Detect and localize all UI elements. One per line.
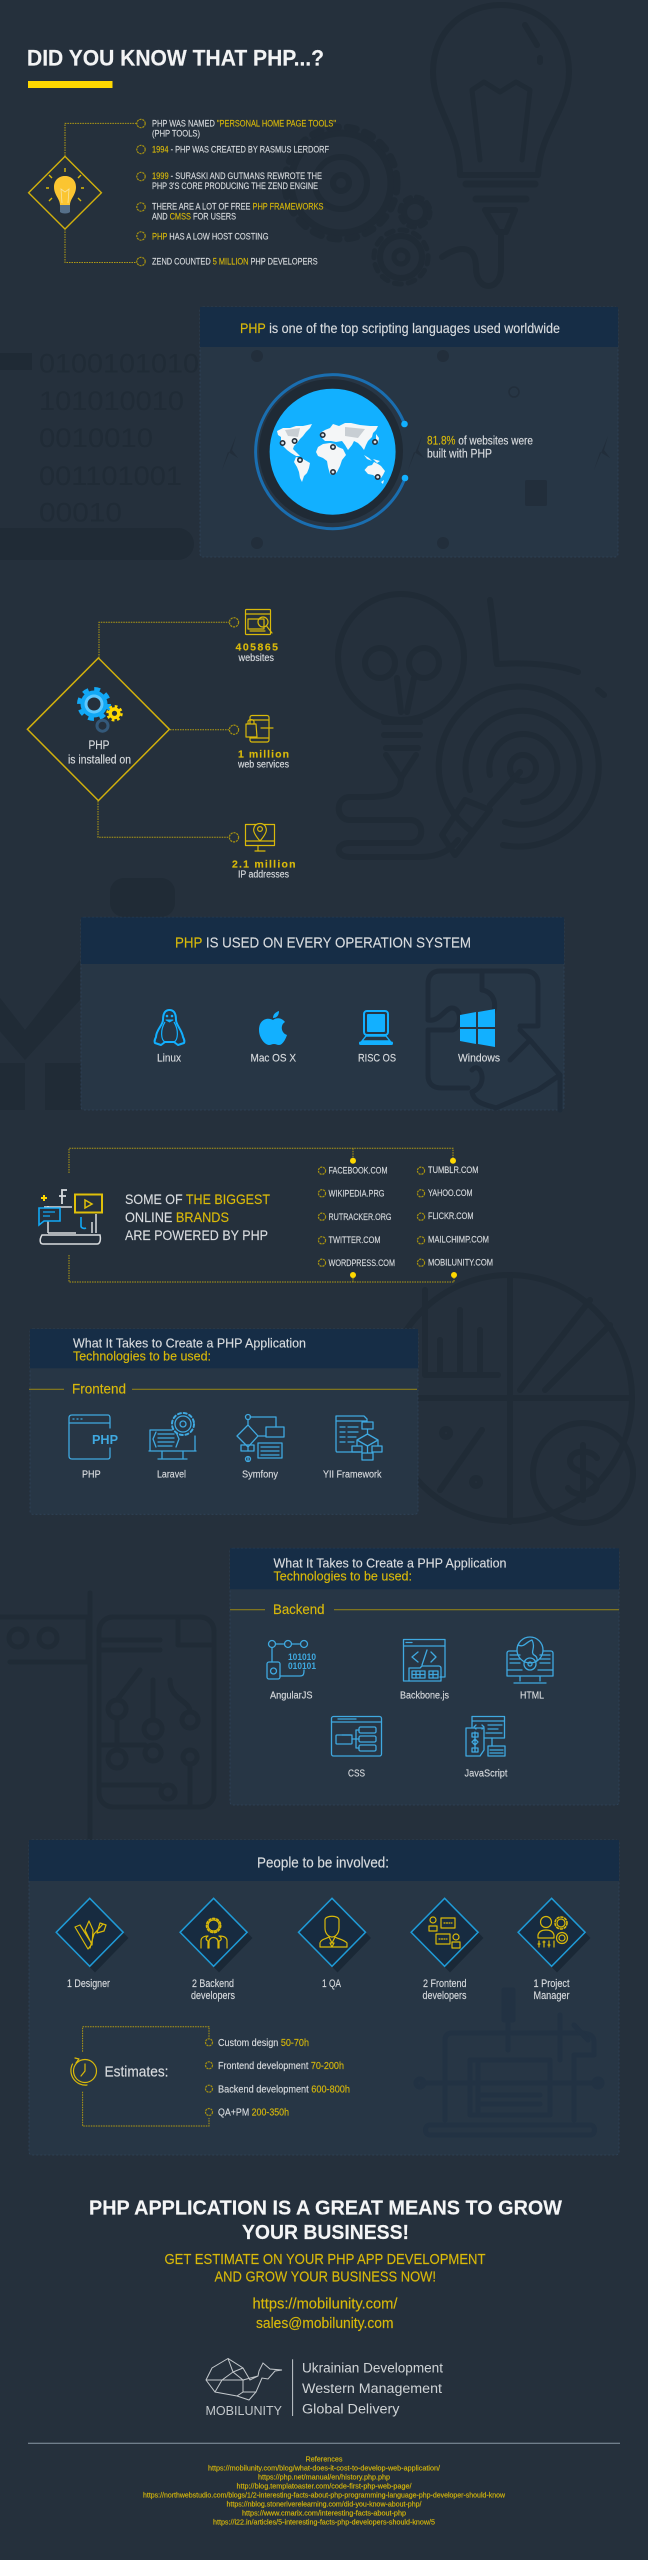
role: QA: 1 QA bbox=[322, 1978, 341, 1990]
role: designer: 1 Designer bbox=[67, 1978, 110, 1990]
technology labels bbox=[82, 1469, 382, 1481]
connector dots bbox=[350, 1158, 457, 1278]
fact texts: ZEND COUNTED 5 MILLION PHP DEVELOPERS bbox=[152, 256, 318, 266]
role: backend developers: 2 Backend bbox=[192, 1978, 234, 1990]
title: DID YOU KNOW THAT PHP...? bbox=[27, 46, 324, 71]
icon: RISC OS computer bbox=[359, 1011, 393, 1045]
brand list: TUMBLR.COM bbox=[428, 1165, 478, 1175]
references: https://nblog.stoneriverelearning.com/did-you-know-about-php/ bbox=[226, 2500, 422, 2509]
title underline bar bbox=[28, 81, 112, 88]
background watermark: pie chart and coin bbox=[386, 1275, 633, 1523]
brand list: WIKIPEDIA.PRG bbox=[328, 1188, 384, 1198]
brand list: MOBILUNITY.COM bbox=[428, 1257, 493, 1267]
brand list: FLICKR.COM bbox=[428, 1211, 474, 1221]
technology labels: HTML bbox=[520, 1689, 544, 1701]
estimates heading: Estimates: bbox=[104, 2064, 168, 2081]
statistic: IP addresses: IP addresses bbox=[238, 870, 289, 881]
panel header bbox=[230, 1548, 619, 1589]
icon: Windows bbox=[460, 1009, 495, 1047]
heading: Technologies to be used: bbox=[73, 1349, 211, 1364]
role: designer bbox=[56, 1898, 129, 1990]
technology labels: AngularJS bbox=[270, 1689, 312, 1701]
brand list: FACEBOOK.COM bbox=[328, 1166, 388, 1176]
OS labels: Windows bbox=[458, 1053, 500, 1065]
panel header bbox=[30, 1329, 418, 1368]
heading: What It Takes to Create a PHP Application bbox=[274, 1555, 506, 1570]
brand list: WORDPRESS.COM bbox=[328, 1258, 395, 1268]
icon: gears bbox=[79, 689, 122, 731]
estimate list: Custom design 50-70h bbox=[218, 2037, 309, 2049]
call to action: https://mobilunity.com/ bbox=[252, 2296, 398, 2313]
panel watermark: laptop bbox=[416, 1990, 602, 2135]
references: https://php.net/manual/en/history.php.php bbox=[258, 2473, 390, 2482]
statistic text: 81.8% of websites were bbox=[427, 435, 533, 447]
fact texts: PHP WAS NAMED "PERSONAL HOME PAGE TOOLS" bbox=[152, 118, 336, 128]
statistic: IP addresses: 2.1 million bbox=[232, 859, 296, 871]
call to action: sales@mobilunity.com bbox=[256, 2315, 394, 2332]
logo: Mobilunity whale bbox=[206, 2358, 293, 2418]
icon: Laravel monitor gear bbox=[149, 1413, 196, 1459]
panel header bbox=[81, 917, 564, 964]
statement text: ONLINE BRANDS bbox=[125, 1209, 229, 1225]
fact texts: THERE ARE A LOT OF FREE PHP FRAMEWORKS bbox=[152, 200, 324, 212]
technology labels bbox=[270, 1689, 544, 1780]
background watermark: binary code: 0100101010 bbox=[39, 349, 199, 379]
statistic text: built with PHP bbox=[427, 448, 492, 460]
panel: biggest online brands bbox=[39, 1148, 493, 1282]
background watermark: binary code bbox=[0, 349, 199, 560]
fact texts: PHP 3'S CORE PRODUCING THE ZEND ENGINE bbox=[152, 180, 318, 191]
background watermark: binary code: 001101001 bbox=[39, 461, 182, 491]
brand list: RUTRACKER.ORG bbox=[328, 1212, 392, 1222]
fact bullets bbox=[137, 119, 145, 266]
brand list: YAHOO.COM bbox=[428, 1188, 473, 1198]
role: backend developers bbox=[180, 1898, 252, 2002]
icon: website search bbox=[246, 610, 272, 634]
OS labels bbox=[157, 1053, 500, 1065]
panel header bbox=[29, 1840, 619, 1881]
panel: PHP facts bbox=[29, 118, 336, 266]
tagline: Global Delivery bbox=[302, 2401, 400, 2416]
technology labels: Laravel bbox=[157, 1469, 186, 1481]
references bbox=[143, 2455, 506, 2527]
heading: Technologies to be used: bbox=[274, 1569, 412, 1584]
panel watermark marks bbox=[222, 350, 610, 549]
call to action: YOUR BUSINESS! bbox=[242, 2222, 409, 2244]
technology labels: CSS bbox=[348, 1768, 365, 1780]
role: project manager: Manager bbox=[534, 1990, 570, 2002]
icon: monitor location bbox=[246, 824, 274, 851]
statistic: web services bbox=[237, 749, 289, 771]
subheading: Backend: Backend bbox=[273, 1601, 324, 1617]
role: frontend developers bbox=[411, 1898, 484, 2002]
call to action: AND GROW YOUR BUSINESS NOW! bbox=[214, 2268, 436, 2285]
background watermark: binary code: 0010010 bbox=[39, 423, 153, 453]
icon: YII flow bbox=[336, 1416, 382, 1460]
references: https://i22.in/articles/5-interesting-facts-php-developers-should-know/5 bbox=[213, 2518, 435, 2527]
icon: PHP window bbox=[69, 1415, 118, 1459]
heading bbox=[73, 1335, 306, 1364]
statement text bbox=[125, 1191, 270, 1243]
statistic: websites: websites bbox=[238, 653, 274, 664]
background watermark: chevron arrow bbox=[0, 878, 175, 1110]
statistic: IP addresses bbox=[232, 859, 296, 881]
estimate bullets bbox=[206, 2039, 212, 2116]
statistic: websites: 405865 bbox=[236, 642, 278, 654]
technology labels: YII Framework bbox=[323, 1469, 382, 1481]
heading: PHP IS USED ON EVERY OPERATION SYSTEM bbox=[175, 935, 471, 952]
brand list bbox=[328, 1165, 493, 1268]
background watermark: gears bbox=[285, 127, 430, 284]
estimate list: Frontend development 70-200h bbox=[218, 2060, 344, 2072]
background watermark: bulb and target bbox=[338, 594, 604, 857]
heading: What It Takes to Create a PHP Application bbox=[73, 1335, 306, 1350]
fact texts: PHP HAS A LOW HOST COSTING bbox=[152, 230, 268, 241]
estimate list: Backend development 600-800h bbox=[218, 2083, 350, 2095]
statistic: websites bbox=[236, 642, 278, 664]
connector nodes bbox=[229, 618, 239, 842]
statistic: web services: 1 million bbox=[238, 749, 289, 761]
icon: AngularJS binary: 010101 bbox=[288, 1661, 317, 1672]
icon: Apple bbox=[259, 1011, 287, 1045]
heading: PHP is one of the top scripting languages used worldwide bbox=[240, 321, 560, 336]
icon: Symfony flowchart bbox=[237, 1414, 284, 1462]
brand list: MAILCHIMP.COM bbox=[428, 1234, 489, 1244]
panel: top scripting languages bbox=[200, 307, 618, 557]
panel: backend technologies bbox=[230, 1548, 619, 1805]
icon: laptop social bbox=[39, 1190, 102, 1244]
fact texts bbox=[152, 118, 336, 266]
technology labels: Symfony bbox=[242, 1469, 279, 1481]
role: project manager: 1 Project bbox=[534, 1978, 570, 1990]
estimates block bbox=[71, 2027, 350, 2126]
icon: PHP window: PHP bbox=[92, 1432, 118, 1447]
tagline: Ukrainian Development bbox=[302, 2361, 443, 2376]
subheading: Frontend: Frontend bbox=[72, 1380, 126, 1396]
references: References bbox=[306, 2455, 343, 2464]
tagline bbox=[302, 2361, 443, 2416]
technology labels: PHP bbox=[82, 1469, 101, 1481]
references: https://mobilunity.com/blog/what-does-it-cost-to-develop-web-application/ bbox=[208, 2464, 441, 2473]
fact texts: (PHP TOOLS) bbox=[152, 128, 200, 138]
fact texts: 1999 - SURASKI AND GUTMANS REWROTE THE bbox=[152, 170, 322, 181]
role: project manager bbox=[518, 1898, 590, 2002]
icon: JavaScript documents bbox=[466, 1716, 505, 1756]
icon: clock bbox=[71, 2058, 96, 2085]
statistic text bbox=[427, 435, 533, 460]
central diamond: is installed on bbox=[68, 754, 131, 766]
icon: HTML globe monitor bbox=[507, 1637, 553, 1683]
background watermark: light bulb top right bbox=[433, 5, 569, 286]
icon: mobile shop bbox=[246, 716, 273, 742]
panel header bbox=[200, 307, 618, 347]
heading: People to be involved: bbox=[257, 1856, 389, 1872]
role: QA bbox=[298, 1898, 371, 1990]
world map bbox=[277, 423, 385, 484]
chart: world globe bbox=[256, 375, 408, 529]
logo: Mobilunity whale: MOBILUNITY bbox=[206, 2403, 282, 2418]
panel watermark: puzzle bbox=[428, 971, 560, 1110]
panel: people to be involved bbox=[29, 1840, 619, 2155]
central diamond: PHP bbox=[88, 740, 110, 752]
central diamond bbox=[27, 658, 169, 801]
technology labels: Backbone.js bbox=[400, 1689, 449, 1701]
estimate list bbox=[218, 2037, 350, 2118]
fact texts: AND CMSS FOR USERS bbox=[152, 210, 236, 222]
panel: PHP is installed on bbox=[27, 610, 296, 881]
tagline: Western Management bbox=[302, 2381, 442, 2396]
call to action bbox=[89, 2198, 562, 2332]
call to action: GET ESTIMATE ON YOUR PHP APP DEVELOPMENT bbox=[164, 2251, 486, 2268]
technology labels: JavaScript bbox=[464, 1768, 508, 1780]
icon: CSS window bbox=[332, 1716, 382, 1756]
references: http://blog.templatoaster.com/code-first-php-web-page/ bbox=[236, 2482, 412, 2491]
heading bbox=[274, 1555, 506, 1584]
references: https://www.cmarix.com/interesting-facts-about-php bbox=[242, 2509, 406, 2518]
icon: Linux bbox=[155, 1010, 184, 1045]
icon: light bulb diamond bbox=[29, 156, 101, 229]
background watermark: circuit board bbox=[0, 1593, 214, 1860]
OS labels: Mac OS X bbox=[250, 1053, 297, 1065]
map pins bbox=[280, 433, 380, 479]
statement text: SOME OF THE BIGGEST bbox=[125, 1191, 270, 1207]
statement text: ARE POWERED BY PHP bbox=[125, 1227, 268, 1243]
icon: Backbone code bbox=[404, 1640, 445, 1681]
brand list: TWITTER.COM bbox=[328, 1235, 380, 1245]
OS labels: Linux bbox=[157, 1053, 181, 1065]
background watermark: binary code: 00010 bbox=[39, 498, 122, 528]
icon: AngularJS binary: 101010 bbox=[288, 1652, 316, 1663]
call to action: PHP APPLICATION IS A GREAT MEANS TO GROW bbox=[89, 2198, 562, 2220]
background watermark: binary code: 101010010 bbox=[39, 386, 184, 416]
icon: AngularJS binary bbox=[267, 1640, 317, 1679]
role: frontend developers: developers bbox=[422, 1990, 467, 2002]
brand bullets bbox=[318, 1167, 425, 1266]
panel: frontend technologies bbox=[29, 1329, 418, 1514]
OS labels: RISC OS bbox=[358, 1053, 396, 1065]
role: backend developers: developers bbox=[191, 1990, 235, 2002]
role: frontend developers: 2 Frontend bbox=[423, 1978, 466, 1990]
panel: operating systems bbox=[81, 917, 564, 1110]
fact texts: 1994 - PHP WAS CREATED BY RASMUS LERDORF bbox=[152, 144, 329, 154]
statistic: web services: web services bbox=[237, 760, 289, 771]
references: https://northwebstudio.com/blogs/1/2-interesting-facts-about-php-programming-language-php-developer-should-know bbox=[143, 2491, 506, 2500]
estimate list: QA+PM 200-350h bbox=[218, 2106, 289, 2118]
